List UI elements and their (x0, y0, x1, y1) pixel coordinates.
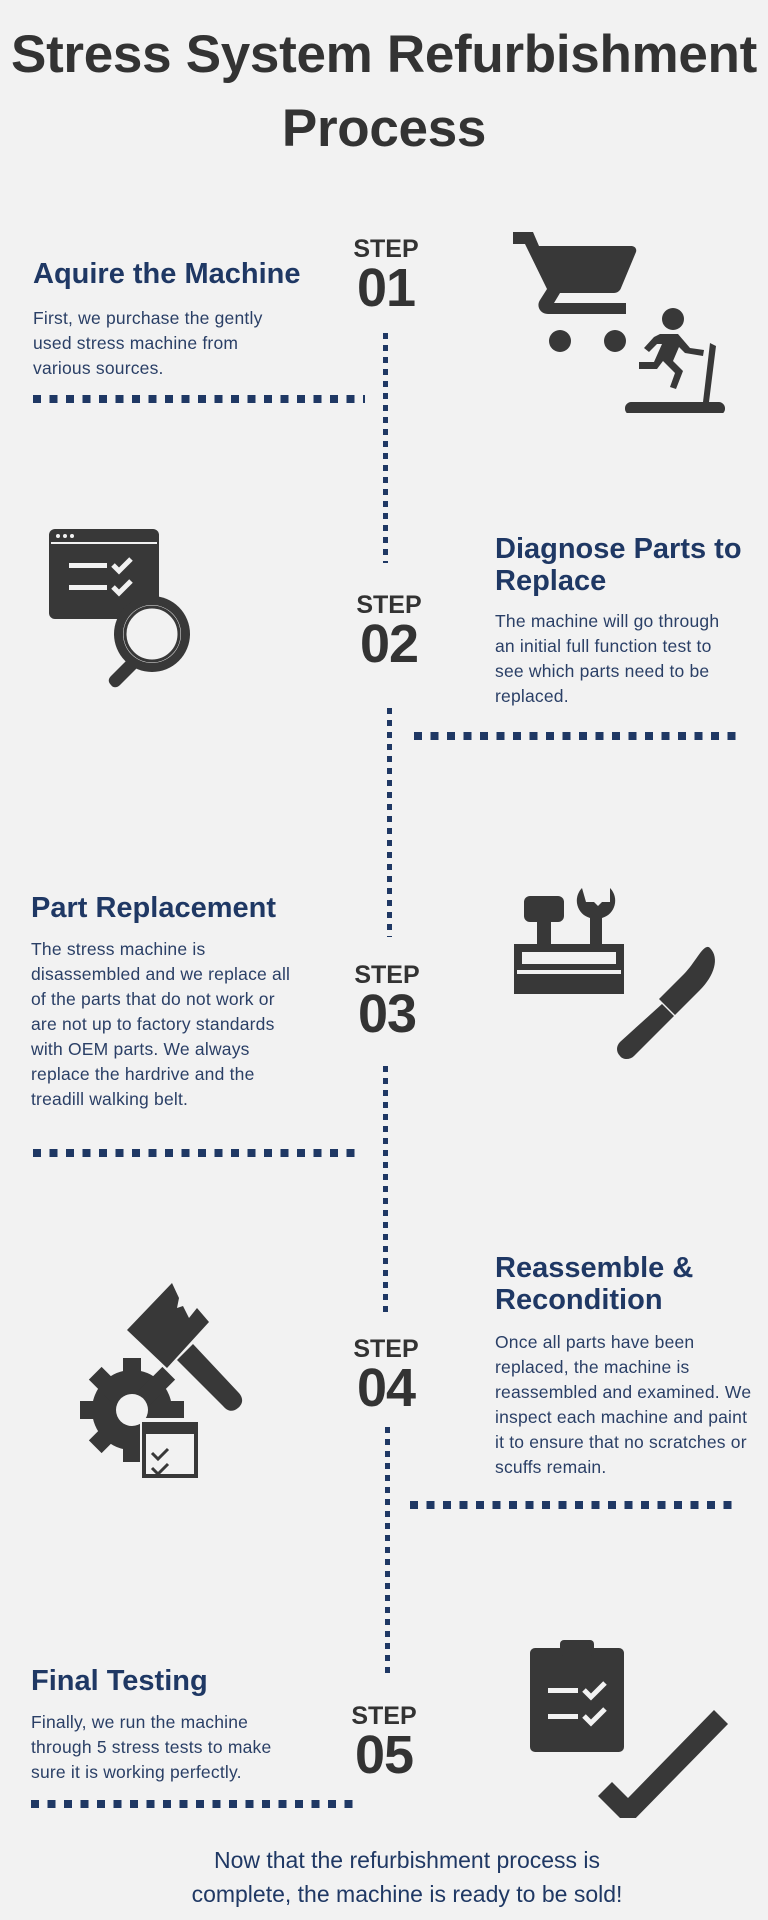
footer text (192, 1847, 622, 1907)
title: Process (282, 99, 486, 158)
step 4 label (353, 1335, 419, 1418)
step 5 heading: Final Testing (31, 1665, 208, 1697)
step 3 divider (33, 1149, 355, 1157)
step 2 heading: Replace (495, 565, 606, 597)
step 2 label (356, 591, 422, 674)
step 2 label: STEP (356, 591, 422, 619)
step 2 divider (414, 732, 740, 740)
step 3 text: The stress machine is disassembled and we replace all of the parts that do not work or are not up to factory standards with OEM parts. We always replace the hardrive and the treadill walking belt. (31, 939, 290, 1109)
vertical dotted line 4 (385, 1427, 390, 1678)
step 2 text: The machine will go through an initial full function test to see which parts need to be replaced. (495, 611, 719, 706)
title (11, 25, 757, 158)
step 1 heading: Aquire the Machine (33, 258, 300, 290)
step 4 label: STEP (353, 1335, 419, 1363)
icon: toolbox and screwdriver (514, 888, 715, 1059)
vertical dotted line 2 (387, 708, 392, 937)
step 5 label: STEP (351, 1702, 417, 1730)
step 4 text: Once all parts have been replaced, the machine is reassembled and examined. We inspect each machine and paint it to ensure that no scratches or scuffs remain. (495, 1332, 751, 1477)
vertical dotted line 1 (383, 333, 388, 563)
footer text: Now that the refurbishment process is (214, 1847, 600, 1873)
step 3 label: 03 (358, 984, 416, 1044)
step 2 label: 02 (360, 614, 418, 674)
title: Stress System Refurbishment (11, 25, 757, 84)
icon: cart and treadmill (513, 232, 725, 413)
step 1 divider (33, 395, 365, 403)
step 4 heading: Recondition (495, 1284, 663, 1316)
step 5 text: Finally, we run the machine through 5 stress tests to make sure it is working perfectly. (31, 1712, 271, 1782)
step 1 label (353, 235, 419, 318)
step 3 heading: Part Replacement (31, 892, 276, 924)
step 5 label: 05 (355, 1725, 413, 1785)
step 4 heading (495, 1252, 693, 1316)
step 1 label: STEP (353, 235, 419, 263)
step 2 heading: Diagnose Parts to (495, 533, 742, 565)
step 4 divider (410, 1501, 738, 1509)
icon: clipboard and checkmark (530, 1640, 728, 1818)
step 4 heading: Reassemble & (495, 1252, 693, 1284)
vertical dotted line 3 (383, 1066, 388, 1317)
step 2 heading (495, 533, 742, 597)
step 3 label: STEP (354, 961, 420, 989)
icon: browser checklist and magnifier (49, 529, 190, 688)
step 4 label: 04 (357, 1358, 415, 1418)
step 5 divider (31, 1800, 355, 1808)
icon: paint brush and gear (80, 1283, 242, 1478)
step 3 label (354, 961, 420, 1044)
step 1 text: First, we purchase the gently used stress machine from various sources. (33, 308, 263, 378)
step 1 label: 01 (357, 258, 415, 318)
step 5 label (351, 1702, 417, 1785)
footer text: complete, the machine is ready to be sold! (192, 1881, 622, 1907)
